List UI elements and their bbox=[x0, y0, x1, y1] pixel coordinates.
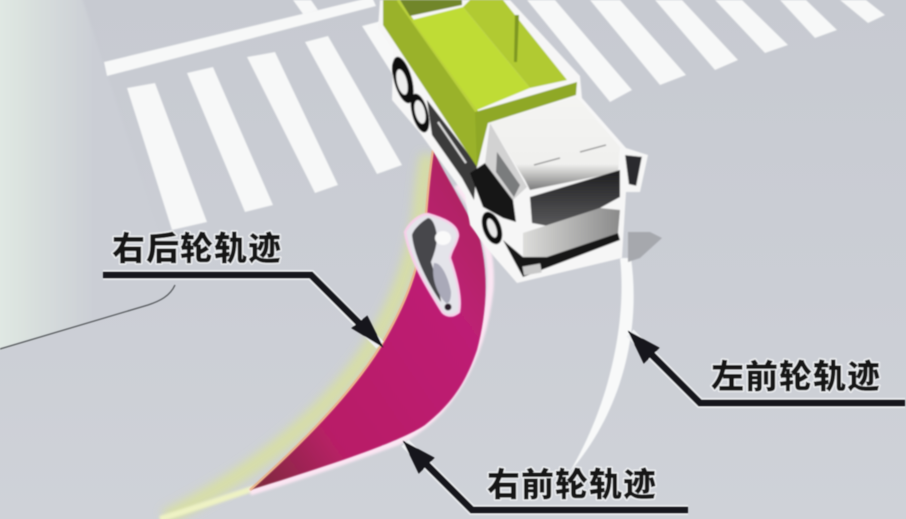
grille and bumper bbox=[523, 208, 620, 257]
cargo bed left wall bbox=[383, 0, 477, 167]
crosswalk and stop line bbox=[104, 0, 885, 230]
label: right front wheel track: 右前轮轨迹 bbox=[487, 466, 657, 503]
cargo bed floor bbox=[412, 7, 530, 110]
magenta area bbox=[250, 150, 486, 490]
motorcycle rider bbox=[405, 214, 460, 316]
arrow: right front leader bbox=[405, 443, 688, 510]
cab roof bbox=[490, 97, 620, 190]
arm highlight bbox=[435, 231, 451, 245]
rear wheels bbox=[388, 54, 433, 134]
dump truck bbox=[378, 0, 662, 283]
front wheel track glow bbox=[250, 185, 490, 492]
side mirror bbox=[624, 154, 643, 187]
white truck outline bbox=[378, 0, 648, 283]
sidewalk corner bbox=[0, 0, 176, 355]
black wheel arch bbox=[470, 163, 516, 222]
label: left front wheel track bbox=[630, 333, 905, 403]
rear track glow bbox=[165, 155, 428, 518]
lower front black bbox=[503, 233, 620, 277]
headboard bbox=[475, 82, 577, 167]
headlight bbox=[522, 263, 542, 275]
tail of the tracks bbox=[160, 488, 255, 519]
road shadow bbox=[628, 232, 662, 262]
cargo bed right wall bbox=[463, 0, 567, 88]
tailgate inner bbox=[400, 0, 462, 16]
scooter body bbox=[433, 263, 451, 303]
left front wheel track bbox=[569, 258, 634, 473]
label: right rear wheel track bbox=[103, 230, 381, 345]
windshield bbox=[530, 170, 620, 227]
front wheel bbox=[478, 209, 506, 247]
cab side bbox=[485, 123, 527, 200]
label: right front wheel track bbox=[405, 443, 688, 510]
inner wheel difference zone (magenta blind area) bbox=[160, 150, 490, 519]
rear track orange edge bbox=[250, 150, 433, 490]
bed stake bbox=[514, 15, 519, 62]
chassis bbox=[427, 100, 477, 200]
arrow: left front leader bbox=[630, 333, 905, 403]
arrow: right rear leader bbox=[103, 275, 381, 345]
outline bbox=[405, 214, 460, 316]
label: right rear wheel track: 右后轮轨迹 bbox=[112, 230, 282, 267]
label: left front wheel track: 左前轮轨迹 bbox=[711, 358, 881, 395]
rider body bbox=[412, 218, 441, 302]
